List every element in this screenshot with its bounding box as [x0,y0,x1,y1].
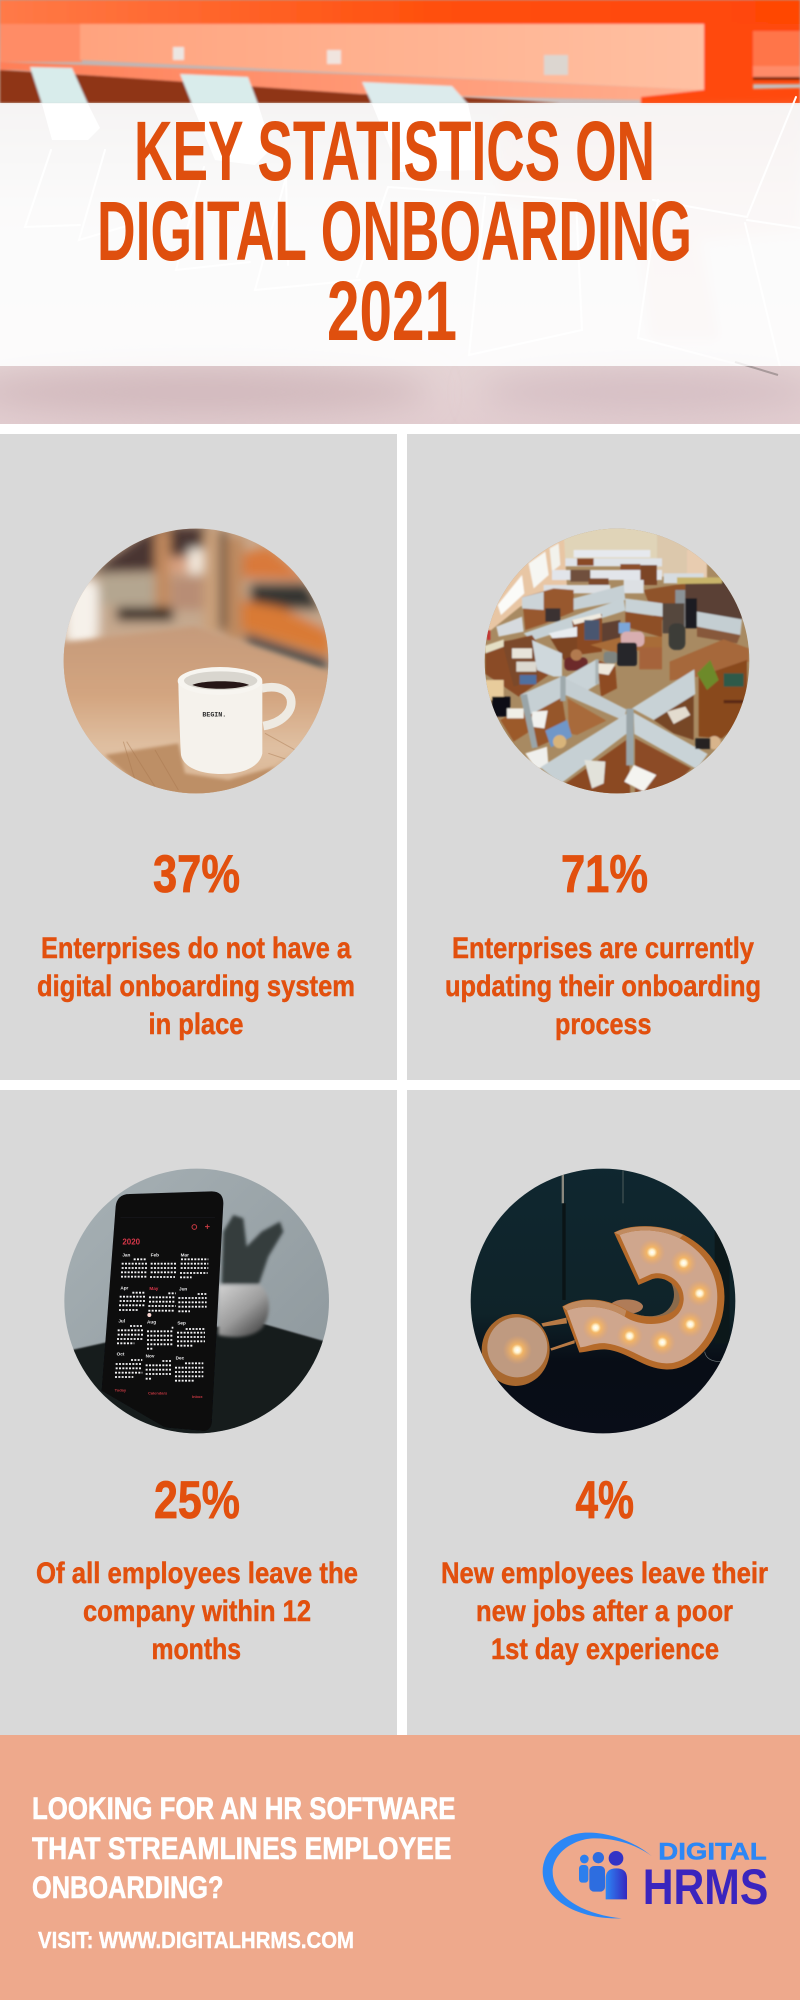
stat: 71%: 71% [561,845,648,904]
bulbs [503,1239,713,1365]
description: Of all employees leave the [36,1557,358,1590]
phone: Sep [177,1321,186,1326]
panel: 37% enterprises without digital onboarding [0,434,397,1080]
phone: Inbox [192,1394,203,1399]
phone: Today [115,1387,127,1392]
description: new jobs after a poor [476,1595,733,1628]
description: 1st day experience [491,1633,719,1666]
phone: Nov [146,1354,155,1359]
photo: coffee mug [64,528,328,794]
wordmark: DIGITAL [658,1838,767,1865]
heading: ONBOARDING? [32,1869,224,1905]
phone: Jul [118,1318,125,1323]
phone: Apr [120,1285,129,1290]
logo: Digital HRMS [543,1833,768,1918]
description: digital onboarding system [37,970,355,1003]
phone: May [149,1286,159,1291]
description: months [152,1633,241,1666]
website link: VISIT: WWW.DIGITALHRMS.COM [38,1927,354,1953]
description [37,932,355,1041]
photo: illuminated question mark [470,1168,736,1434]
title: 2021 [327,264,457,358]
title banner [0,103,800,366]
description: Enterprises are currently [452,932,754,965]
hero photo: office desk with chairs [0,0,800,424]
logo: Digital HRMS: HRMS [643,1858,768,1915]
panel: 25% employees leave within 12 months [0,1090,397,1735]
stat: 37%: 37% [153,845,240,904]
plant and pot [218,1215,283,1337]
photo: open plan office [484,528,750,794]
stat: 4%: 4% [576,1471,634,1530]
description: in place [148,1008,244,1041]
heading [32,1790,456,1905]
heading: LOOKING FOR AN HR SOFTWARE [32,1790,456,1826]
title [97,104,692,358]
description [445,932,761,1041]
heading: THAT STREAMLINES EMPLOYEE [32,1830,452,1866]
description [441,1557,768,1666]
phone [102,1191,223,1431]
panel: 4% new employees leave [407,1090,800,1735]
description [36,1557,358,1666]
phone: 2020 [122,1238,141,1247]
photo: phone with calendar [64,1168,329,1434]
phone: Feb [151,1253,159,1258]
stat: 25%: 25% [154,1471,240,1530]
phone: Oct [117,1352,125,1357]
panel: 71% enterprises updating process [407,434,800,1080]
panel: footer call to action [0,1735,800,2000]
phone: Jun [179,1287,187,1292]
phone: Dec [176,1355,185,1360]
phone: Mar [181,1253,189,1258]
phone: Aug [147,1320,156,1325]
phone: Calendars [148,1390,168,1395]
description: company within 12 [83,1595,311,1628]
phone: Jan [122,1253,131,1258]
description: Enterprises do not have a [41,932,351,965]
description: process [555,1008,652,1041]
icon: crescent and people [543,1833,652,1918]
mug [178,667,291,774]
mug: BEGIN. [202,711,226,719]
